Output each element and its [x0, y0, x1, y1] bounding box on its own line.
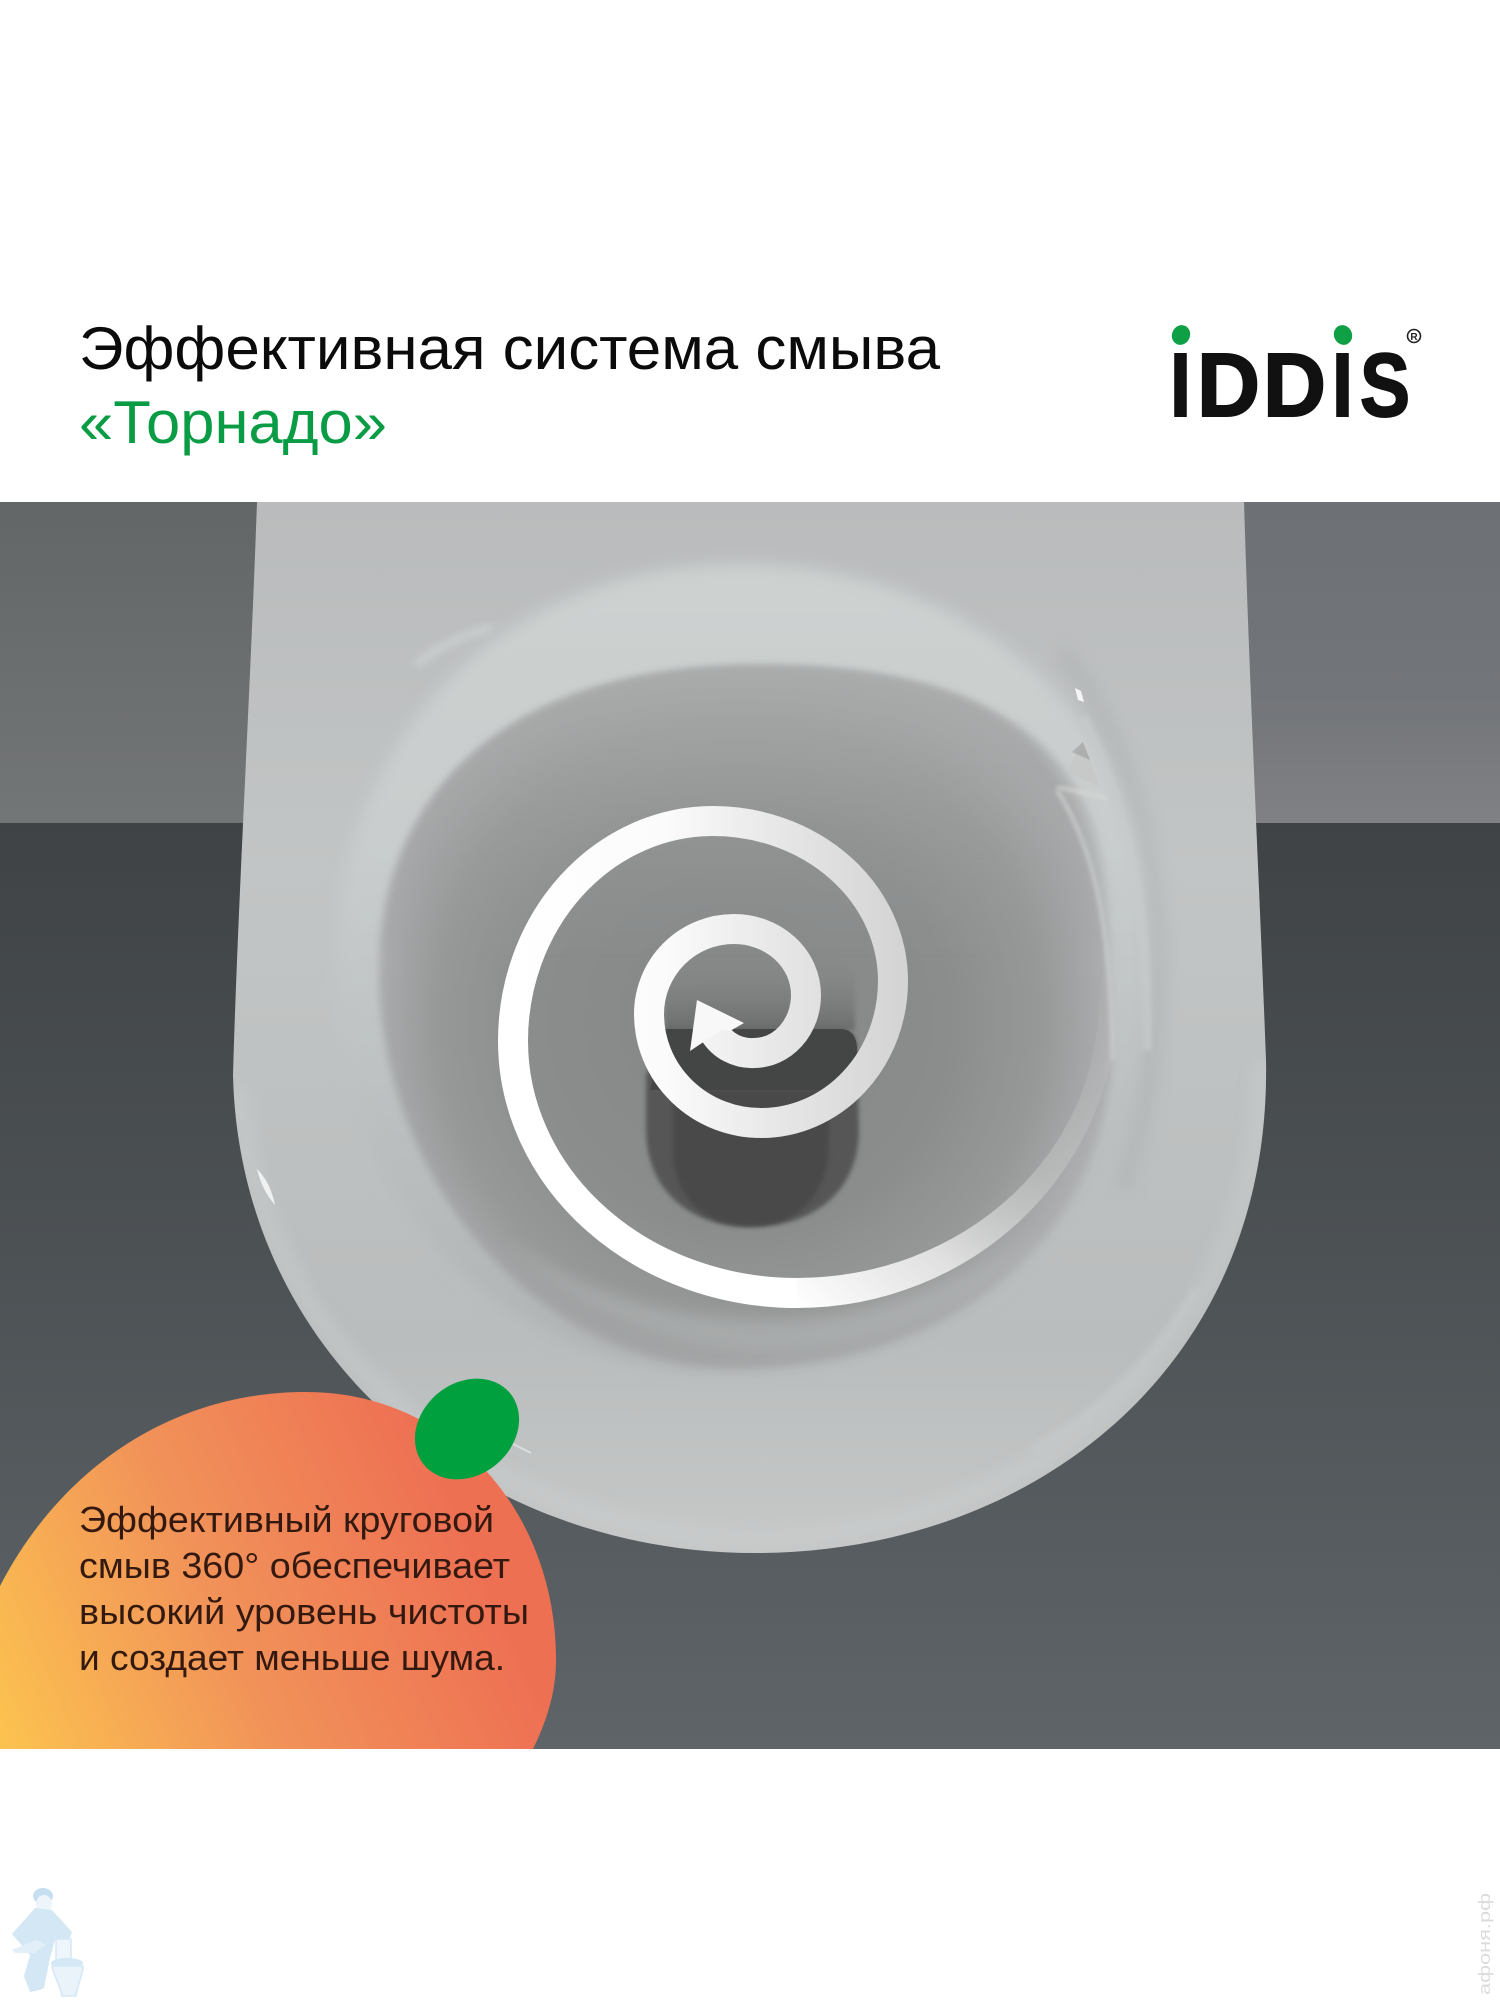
description text	[79, 1499, 529, 1678]
logo: IDDIS: D	[1263, 336, 1326, 436]
watermark: plumber with toilet	[12, 1888, 83, 1996]
logo: IDDIS: S	[1360, 336, 1410, 436]
title: Эффективная система смыва	[79, 315, 941, 382]
logo: IDDIS: I	[1170, 336, 1191, 436]
spiral body	[513, 821, 893, 1123]
toilet body	[233, 502, 1266, 1553]
background: wall and floor	[0, 502, 1500, 1749]
logo: IDDIS: I	[1332, 336, 1353, 436]
logo: IDDIS: D	[1197, 336, 1260, 436]
orange gradient blob	[0, 1392, 556, 1749]
description text: Эффективный круговой	[79, 1499, 494, 1540]
description text: высокий уровень чистоты	[79, 1591, 529, 1632]
tornado spiral arrow	[513, 821, 1117, 1308]
watermark: site name: афоня.рф	[1475, 1893, 1494, 1995]
rim glints	[257, 1169, 1195, 1453]
description text: смыв 360° обеспечивает	[79, 1545, 510, 1586]
arrow head	[690, 1000, 744, 1051]
photo: toilet bowl seen from above	[0, 502, 1500, 1749]
green ellipse accent	[414, 1378, 520, 1480]
title: «Торнадо»	[79, 389, 387, 456]
logo: IDDIS: R	[1410, 332, 1418, 343]
logo: IDDIS	[1169, 322, 1420, 436]
bowl interior	[240, 564, 1262, 1537]
jet outlet	[1057, 688, 1147, 1060]
description text: и создает меньше шума.	[79, 1637, 505, 1678]
title	[79, 315, 941, 456]
drain	[644, 994, 861, 1230]
spiral fading tail	[797, 1072, 1099, 1308]
spiral outer sweep	[513, 1041, 797, 1293]
